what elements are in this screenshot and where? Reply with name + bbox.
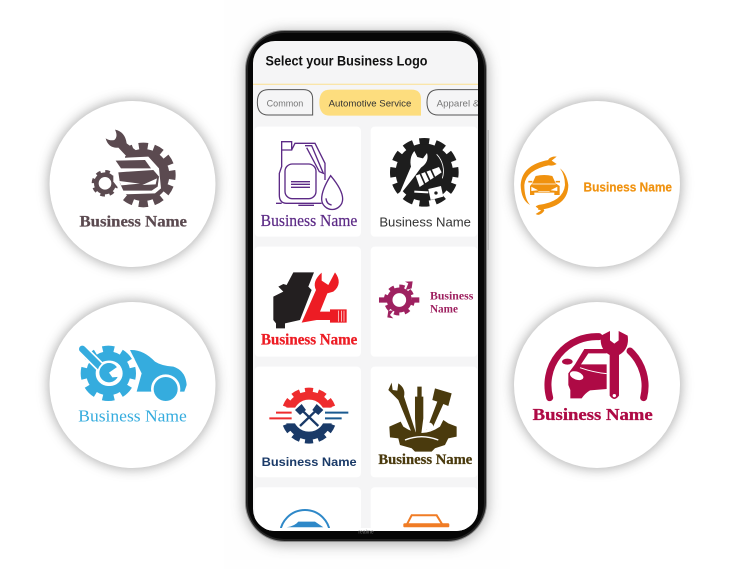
logo card: gear with spring: Business Name bbox=[379, 215, 471, 230]
logo card: gear with spring bbox=[371, 127, 477, 237]
logo card: car and red wrench bbox=[255, 247, 361, 357]
badge: orange car and wrenches logo bbox=[513, 100, 681, 268]
badge: brown car and gear logo bbox=[48, 100, 216, 268]
logo card: pistons and gear bbox=[255, 367, 361, 477]
logo card: magenta gear: Business bbox=[430, 288, 474, 302]
logo card: brown tools: Business Name bbox=[378, 452, 473, 468]
logo card: oil jug bbox=[255, 127, 361, 237]
brown logo name: Business Name bbox=[80, 214, 187, 231]
phone brand mark: realme bbox=[358, 530, 374, 536]
category tabs: Common bbox=[267, 98, 303, 108]
category tabs: Apparel & bbox=[437, 98, 480, 108]
orange logo name: Business Name bbox=[584, 180, 672, 195]
logo card: oil jug: Business Name bbox=[261, 211, 357, 230]
logo card: blue car, cut off bbox=[254, 488, 361, 531]
category tabs bbox=[257, 90, 493, 116]
logo card: pistons and gear: Business Name bbox=[262, 455, 357, 469]
logo card: magenta gear: Name bbox=[430, 302, 459, 316]
logo card: brown tools bbox=[371, 367, 477, 477]
logo card: car and red wrench: Business Name bbox=[261, 332, 358, 349]
badge: blue car with gear logo bbox=[48, 301, 216, 469]
screen heading: Select your Business Logo bbox=[266, 54, 428, 68]
blue logo name: Business Name bbox=[78, 407, 187, 426]
badge: crimson car and wrench logo bbox=[513, 301, 681, 469]
category tabs: Automotive Service bbox=[329, 98, 411, 108]
app screen bbox=[253, 41, 478, 531]
logo card: magenta gear bbox=[371, 247, 477, 357]
phone mockup bbox=[245, 30, 493, 560]
logo card: orange car, cut off bbox=[371, 487, 477, 531]
crimson logo name: Business Name bbox=[533, 405, 653, 424]
